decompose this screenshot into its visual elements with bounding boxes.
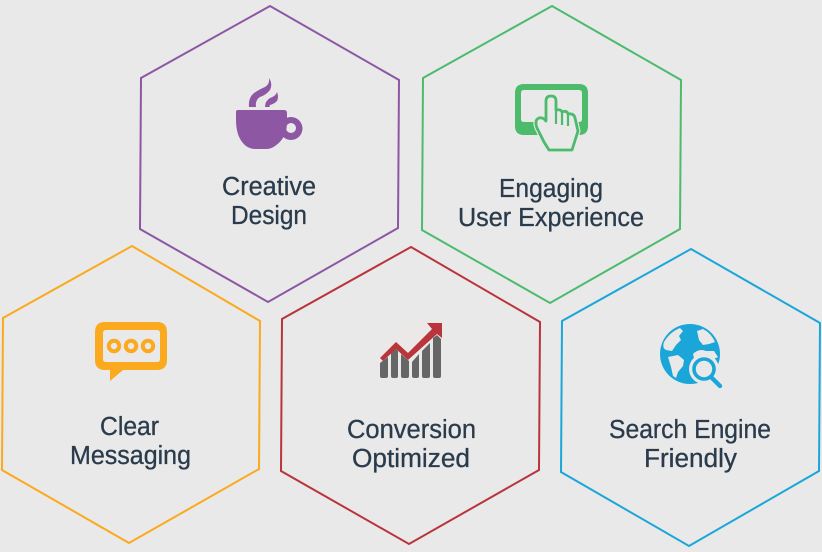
heading: creative design: Design: [231, 202, 307, 230]
hexagon outline: search engine friendly: [561, 249, 820, 546]
panel: creative design: [140, 6, 399, 302]
heading: clear messaging: Messaging: [70, 442, 191, 470]
hexagon outline: conversion optimized: [281, 247, 540, 544]
panel: search engine friendly: [561, 249, 820, 546]
heading: conversion optimized: Optimized: [352, 445, 470, 473]
hexagon outline: clear messaging: [2, 246, 260, 543]
panel: conversion optimized: [281, 247, 540, 544]
heading: search engine friendly: Friendly: [644, 445, 737, 473]
heading: creative design: Creative: [222, 173, 316, 201]
icon: coffee cup: [236, 78, 302, 149]
hexagon outline: creative design: [140, 6, 399, 302]
heading: search engine friendly: Search Engine: [609, 416, 771, 444]
icon: globe with magnifier: [660, 324, 720, 386]
icon: speech bubble: [95, 322, 167, 381]
icon: growth chart: [379, 318, 442, 378]
icon: touch tablet: [515, 84, 588, 150]
panel: engaging user experience: [422, 6, 681, 303]
hexagon outline: engaging user experience: [422, 6, 681, 303]
heading: engaging user experience: User Experience: [458, 204, 644, 232]
heading: search engine friendly: [609, 416, 771, 473]
heading: engaging user experience: Engaging: [499, 175, 603, 203]
heading: creative design: [222, 173, 316, 230]
heading: conversion optimized: Conversion: [347, 416, 476, 444]
heading: conversion optimized: [347, 416, 476, 473]
heading: clear messaging: Clear: [100, 413, 159, 441]
heading: engaging user experience: [458, 175, 644, 232]
heading: clear messaging: [70, 413, 191, 470]
panel: clear messaging: [2, 246, 260, 543]
